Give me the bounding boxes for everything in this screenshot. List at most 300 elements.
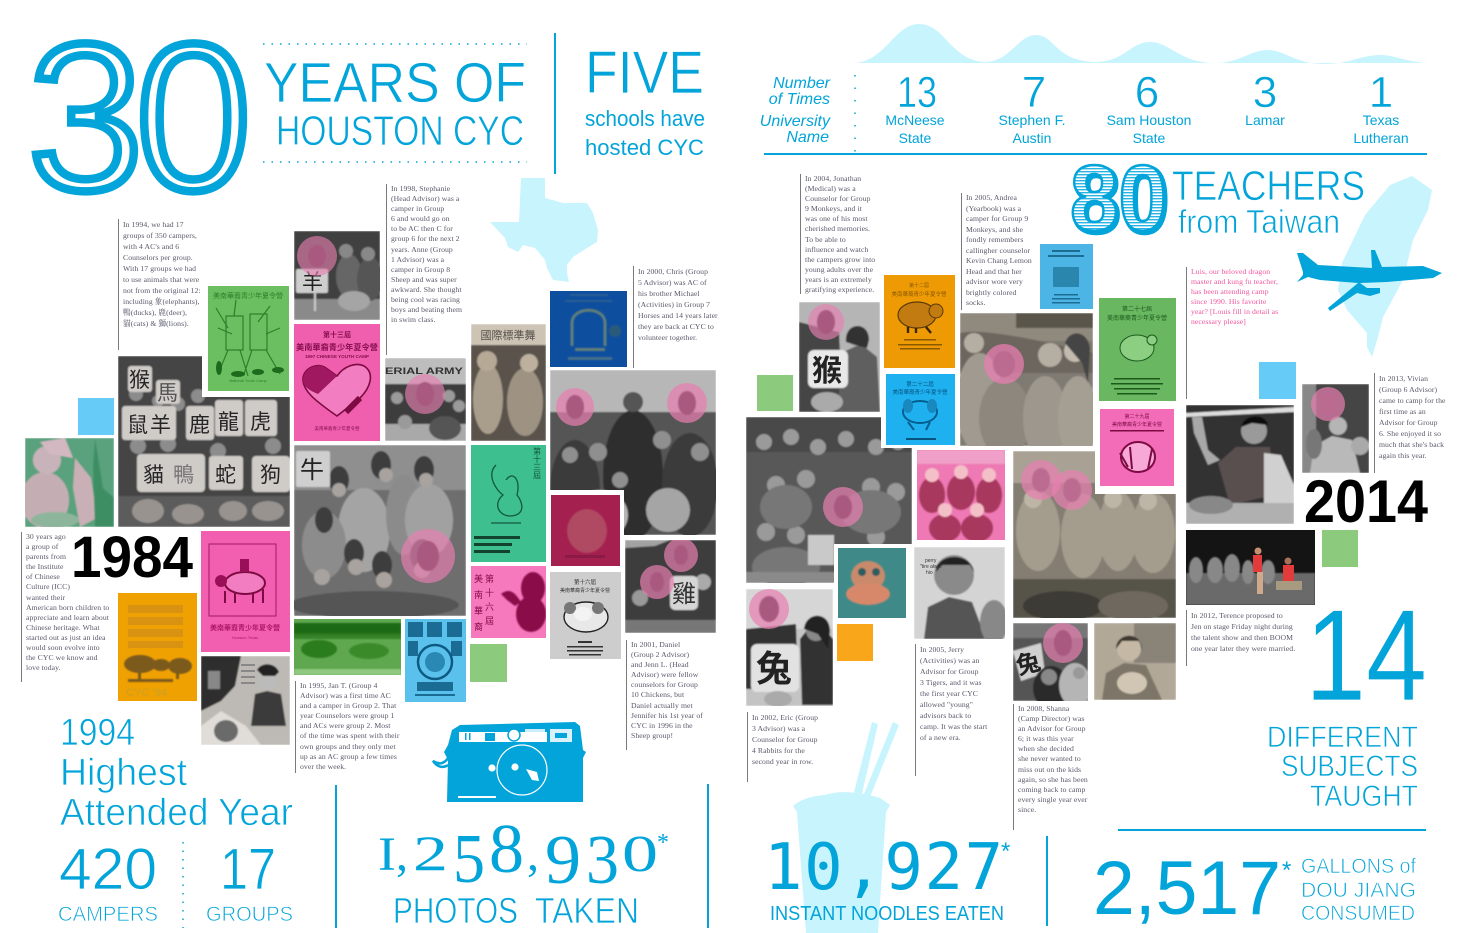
note: 2001: In 2001, Daniel	[631, 640, 680, 649]
white mat around pink tiger poster	[1095, 405, 1180, 494]
note: 1994: groups of 350 campers,	[123, 231, 197, 240]
photo: Jerry	[914, 547, 1005, 639]
poster: dark blue	[550, 291, 627, 367]
note: 2004	[800, 174, 875, 294]
note: 1995: up as an AC group a few times	[300, 752, 397, 761]
photo: ballroom clipping	[471, 324, 546, 441]
chart: wave of school counts	[760, 24, 1428, 64]
stat: photos taken: PHOTOS	[393, 890, 518, 931]
photo: rabbit group: 兔	[1013, 648, 1043, 681]
photo: four counselors	[960, 313, 1093, 446]
divider	[707, 784, 709, 928]
note: 2005 Andrea: socks.	[966, 298, 986, 307]
note: 2001: CYC in 1996 in the	[631, 721, 693, 730]
note: 2005 Jerry: Advisor for Group	[920, 667, 979, 676]
photo: chicken sign with pink circles: 雞	[672, 581, 696, 608]
poster: green turtle: 第二十七屆	[1122, 305, 1152, 313]
note: 2002	[747, 712, 818, 782]
note: 2000: 5 Advisor) was AC of	[638, 278, 707, 287]
poster: blue small	[1040, 244, 1093, 309]
note: Luis: Luis, our beloved dragon	[1191, 267, 1270, 276]
title: years of Houston CYC	[263, 44, 527, 162]
stat: 14 different subjects taught: 14	[1305, 582, 1427, 728]
five schools have hosted CYC: hosted CYC	[585, 135, 704, 160]
80 teachers from Taiwan: TEACHERS	[1172, 162, 1365, 209]
note: 1998: boys and beating them	[391, 305, 462, 314]
photo: big group ox sign: 牛	[300, 457, 324, 484]
note: 1998: (Head Advisor) was a	[391, 194, 459, 203]
note: 2000: Horses and 14 years later	[638, 311, 718, 320]
note: 1995	[295, 681, 400, 773]
poster: pink heart: 美南華裔青少年夏令營	[314, 425, 360, 432]
stat: photos taken: I	[378, 828, 396, 881]
photo: green duotone	[25, 438, 114, 527]
photo: ballroom clipping: 國際標準舞	[480, 328, 536, 342]
note: 1994: With 17 groups we had	[123, 264, 196, 273]
stat: gallons of dou jiang: CONSUMED	[1301, 902, 1415, 925]
poster: pink 16th: 裔	[474, 621, 483, 632]
note: 2004: gratifying experience.	[805, 285, 874, 294]
note: 2001: and Jenn L. (Head	[631, 660, 689, 669]
stat: 14 different subjects taught: DIFFERENT	[1267, 721, 1418, 754]
note: 2008: In 2008, Shanna	[1018, 704, 1069, 713]
poster: green vegetables: 美南華裔青少年夏令營	[213, 291, 283, 300]
photo: old group sepia	[1013, 451, 1176, 618]
note: 2008: an Advisor for Group	[1018, 724, 1086, 733]
note: 2005 Andrea: In 2005, Andrea	[966, 193, 1017, 202]
note: 2005 Andrea: Head and that her	[966, 266, 1022, 276]
photo: zodiac signs group: 龍	[218, 411, 239, 434]
icon: Taiwan map	[1338, 176, 1432, 357]
table: universities and times hosted: Austin	[1013, 130, 1051, 146]
poster: sheep: 第十六屆	[574, 578, 596, 586]
poster: green turtle: 美南華裔青少年夏令營	[1107, 314, 1167, 322]
photo: large group with pink circles	[550, 370, 716, 535]
poster: sheep	[550, 572, 621, 659]
photo: monkey sign	[799, 302, 880, 412]
table: universities and times hosted: Lutheran	[1353, 130, 1409, 146]
poster: pink heart: 美南華裔青少年夏令營	[296, 342, 378, 352]
poster: teal rabbit: 第十三屆	[532, 446, 542, 480]
note: 2005 Andrea: Kevin Chang Lemon	[966, 256, 1032, 265]
note: 1998: camper in Group	[391, 204, 444, 213]
poster: pink 16th: 南	[474, 589, 483, 600]
note: 2004: 9 Monkeys, and it	[805, 204, 862, 213]
poster: blue dog: 美南華裔青少年夏令營	[892, 388, 948, 396]
stat: 420 campers and 17 groups: 17	[220, 837, 276, 902]
stat: photos taken: 9	[545, 822, 581, 899]
note: 30 years ago: Chinese heritage. What	[26, 623, 100, 632]
note: 2005 Jerry: the first year CYC	[920, 689, 978, 698]
big year 2014: 2014	[1304, 468, 1429, 535]
note: 2000: (Activities) in Group 7	[638, 300, 710, 309]
note: 1998: 6 and would go on	[391, 214, 450, 223]
photo: zodiac signs group: 狗	[260, 464, 281, 487]
note: 1995: In 1995, Jan T. (Group 4	[300, 681, 377, 690]
note: 30 years ago: parents from	[26, 552, 66, 561]
note: 1998: 1 Advisor) was a	[391, 255, 444, 264]
note: 2005 Andrea: camper for Group 9	[966, 214, 1028, 223]
note: 2004: young adults over the	[805, 265, 873, 274]
note: 30 years ago: of Chinese	[26, 572, 60, 581]
note: 1994: not from the original 12:	[123, 286, 201, 295]
poster: pink 16th: 美	[474, 573, 483, 584]
photo: zodiac signs group: 猴	[129, 369, 150, 392]
stat: 14 different subjects taught	[1267, 582, 1427, 813]
note: Luis: master and kung fu teacher,	[1191, 277, 1278, 286]
note: 2005 Andrea: callingher counselor	[966, 246, 1030, 254]
stat: photos taken: *	[657, 830, 669, 856]
photo: big group ox sign	[294, 445, 466, 616]
note: 2005 Andrea: Monkeys, and she	[966, 224, 1023, 234]
photo: group with banner	[385, 358, 466, 441]
note: 2001: 10 Chickens, but	[631, 690, 684, 699]
poster: pink ox	[201, 531, 290, 652]
photo: rabbit group	[1013, 623, 1088, 701]
stat: photos taken	[378, 811, 669, 931]
note: 2004: years is an extremely	[805, 275, 872, 284]
photo: pink group	[917, 450, 1005, 540]
note: 2004: influence and watch	[805, 245, 868, 254]
note: 1995: of the time was spent with their	[300, 731, 400, 740]
five schools have hosted CYC: FIVE	[585, 39, 704, 106]
white mat around blue dog poster	[881, 370, 912, 448]
note: 30 years ago: the Institute	[26, 562, 64, 571]
note: Luis	[1186, 267, 1278, 399]
table: universities and times hosted: Lamar	[1245, 112, 1285, 128]
icon: airplane	[1297, 250, 1442, 311]
note: 30 years ago: Culture (ICC)	[26, 582, 70, 591]
table: universities and times hosted: McNeese	[885, 112, 945, 128]
photo: Jerry: "tire alwin"	[920, 564, 944, 570]
note: 2005 Jerry: of a new era.	[920, 733, 961, 742]
80 teachers from Taiwan: 80	[1072, 148, 1169, 252]
stat: photos taken: 3	[586, 822, 619, 899]
photo: rabbit sign	[746, 589, 833, 706]
stat: 420 campers and 17 groups: GROUPS	[206, 903, 293, 926]
stat: 1994 highest attended year: 1994	[60, 712, 135, 754]
note: 2004: the campers grow into	[805, 255, 875, 264]
poster: blue star	[405, 619, 466, 702]
note: 1998: awkward. She thought	[391, 285, 462, 294]
photo: zodiac signs group: 鴨	[173, 464, 194, 487]
photo: zodiac signs group: 鹿	[189, 414, 210, 437]
note: 2013: much that she's back	[1379, 440, 1444, 449]
photo: sheep sign group: 羊	[302, 271, 323, 294]
photo: zodiac signs group: 貓	[143, 464, 164, 487]
stat: 1994 highest attended year: Attended Year	[60, 792, 293, 834]
note: 30 years ago: appreciate and learn about	[26, 613, 109, 622]
note: 2000: his brother Michael	[638, 289, 700, 298]
poster: green vegetables: National Youth Camp	[229, 378, 268, 383]
divider	[335, 785, 337, 928]
photo: zodiac signs group: 鼠	[127, 414, 148, 437]
photo: zodiac signs group	[118, 356, 290, 527]
note: 30 years ago: American born children to	[26, 603, 109, 612]
note: 1995: own groups and they only met	[300, 742, 396, 751]
poster: green vegetables	[208, 286, 289, 391]
white mat behind poster	[202, 282, 295, 397]
note: 30 years ago: love today.	[26, 663, 61, 672]
note: 2013: In 2013, Vivian	[1379, 374, 1428, 383]
poster: pink 16th: 十	[485, 587, 494, 598]
note: 2005 Jerry	[915, 644, 987, 776]
photo: zodiac signs group: 蛇	[215, 464, 236, 487]
poster: orange pig	[884, 275, 955, 368]
stat: 420 campers and 17 groups: CAMPERS	[58, 903, 158, 926]
note: 2008: (Camp Director) was	[1018, 714, 1084, 723]
photo: sheep sign group	[294, 231, 380, 320]
note: 2005 Andrea: brightly colored	[966, 288, 1017, 296]
stat: instant noodles eaten: 10,927	[764, 831, 1005, 905]
note: 2002: 3 Advisor) was a	[752, 724, 805, 733]
note: 1998: to be AC then C for	[391, 224, 453, 233]
table: universities and times hosted: of Times	[769, 91, 830, 108]
icon: Texas map	[490, 178, 598, 282]
photo: big group monkey	[746, 417, 912, 583]
note: 1994: with 4 AC's and 6	[123, 242, 179, 251]
table: universities and times hosted: State	[899, 130, 932, 146]
80 teachers from Taiwan	[1070, 146, 1365, 252]
note: 2005 Andrea: advisor wore very	[966, 277, 1023, 286]
poster: maroon	[551, 495, 620, 566]
photo: monkey sign: 猴	[812, 355, 842, 388]
note: Luis: since 1990. His favorite	[1191, 297, 1266, 306]
table: universities and times hosted: Sam Houston	[1107, 112, 1191, 128]
stat: photos taken: TAKEN	[535, 890, 639, 931]
stat: instant noodles eaten: *	[1001, 838, 1010, 865]
five schools have hosted CYC	[585, 39, 705, 160]
photo: rabbit sign: 兔	[756, 648, 792, 689]
table: universities and times hosted: 7	[1022, 68, 1046, 117]
stat: photos taken: ,	[527, 828, 539, 881]
poster: pink 16th: 第	[485, 573, 494, 584]
note: 2012: In 2012, Terence proposed to	[1191, 611, 1283, 620]
table: universities and times hosted: University	[760, 113, 831, 130]
note: 1998	[386, 184, 462, 355]
note: 2005 Jerry: In 2005, Jerry	[920, 645, 964, 654]
photo: Vivian	[1302, 384, 1369, 473]
note: 2000	[633, 266, 718, 368]
note: 2005 Andrea	[961, 193, 1032, 310]
colored square	[837, 624, 873, 661]
stat: photos taken: 0	[622, 826, 658, 883]
note: 2001: Daniel actually met	[631, 701, 693, 710]
note: 2004: (Medical) was a	[805, 184, 856, 193]
note: 1995: and ACs were group 2. Most	[300, 721, 390, 730]
divider top	[554, 33, 556, 174]
icon: noodle cup with chopsticks	[793, 722, 899, 933]
colored square	[1259, 362, 1296, 399]
note: 1994: to use animals that were	[123, 275, 199, 284]
photo: chicken sign with pink circles	[625, 540, 716, 633]
photo: woman smiling	[1094, 623, 1176, 700]
white mat around maroon poster	[546, 490, 624, 572]
note: 1994	[118, 219, 201, 350]
stat: instant noodles eaten: INSTANT NOODLES EATEN	[770, 903, 1004, 925]
table: universities and times hosted	[760, 68, 1427, 155]
poster: pink tiger	[1100, 409, 1174, 486]
photo: zodiac signs group: 馬	[157, 382, 178, 405]
table: universities and times hosted: 3	[1253, 68, 1277, 117]
note: 2005 Jerry: (Activities) was an	[920, 656, 980, 665]
note: 2013: came to camp for the	[1379, 396, 1446, 405]
note: 2008: she never wanted to	[1018, 754, 1081, 763]
note: 2000: they are back at CYC to	[638, 322, 714, 331]
note: 1995: year Counselors were group 1	[300, 711, 394, 720]
note: 1995: and a camper in Group 2. That	[300, 701, 396, 710]
stat: photos taken: 2	[413, 825, 448, 881]
poster: orange trees	[118, 593, 197, 701]
note: 1994: Counselors per group.	[123, 253, 193, 262]
note: 2001: counselors for Group	[631, 680, 698, 689]
stat: gallons of dou jiang: DOU JIANG	[1301, 879, 1416, 902]
photo: group with banner: ERIAL ARMY	[385, 366, 464, 377]
note: 1998: In 1998, Stephanie	[391, 184, 450, 193]
photo: green banquet	[294, 619, 401, 675]
poster: blue dog: 第二十二屆	[906, 380, 934, 388]
note: 2013: (Group 6 Advisor)	[1379, 385, 1437, 394]
five schools have hosted CYC: schools have	[585, 106, 705, 131]
note: 2001: Advisor) were fellow	[631, 670, 698, 679]
poster: teal rabbit	[471, 445, 546, 562]
note: 2005 Jerry: advisors back to	[920, 711, 971, 720]
note: 30 years ago: would soon evolve into	[26, 643, 100, 652]
note: 1998: being cool was racing	[391, 295, 460, 304]
title: years of Houston CYC: HOUSTON CYC	[276, 107, 524, 154]
stat: 420 campers and 17 groups: 420	[59, 837, 157, 902]
note: 1998: camper in Group 8	[391, 265, 450, 274]
80 teachers from Taiwan: 80	[1070, 146, 1167, 250]
note: 2001: Sheep group!	[631, 731, 673, 740]
note: 30 years ago: 30 years ago	[26, 532, 66, 541]
icon: camera	[433, 722, 586, 802]
colored square	[78, 398, 114, 435]
poster: orange pig: 第十二屆	[909, 282, 929, 289]
note: 1994: In 1994, we had 17	[123, 220, 184, 229]
poster: pink heart: 1997 CHINESE YOUTH CAMP	[305, 354, 369, 359]
note: 2005 Jerry: 3 Tigers, and it was	[920, 678, 982, 687]
note: Luis: year? [Louis fill in detail as	[1191, 307, 1278, 316]
note: 2001: Jennifer his 1st year of	[631, 711, 703, 720]
stat: photos taken: ,	[396, 828, 408, 881]
note: 2001: (Group 2 Advisor)	[631, 650, 689, 659]
note: 2004: In 2004, Jonathan	[805, 174, 861, 183]
note: 1994: 鴨(ducks), 鹿(deer),	[123, 308, 187, 317]
note: 1998: group 6 for the next 2	[391, 234, 460, 243]
table: universities and times hosted: 13	[897, 68, 937, 117]
poster: teal monkey	[838, 548, 906, 618]
note: 2013: again this year.	[1379, 451, 1427, 460]
white mat around teal poster	[834, 544, 912, 589]
stat: 14 different subjects taught: TAUGHT	[1310, 780, 1418, 813]
poster: pink 16th	[471, 566, 546, 638]
note: 2008: coming back to camp	[1018, 785, 1085, 794]
note: 1995: Advisor) was a first time AC	[300, 691, 391, 700]
photo: woman on phone	[201, 656, 290, 745]
note: 2013: Advisor for Group	[1379, 418, 1438, 427]
photo: man with staff	[1186, 405, 1294, 524]
note: Luis: has been attending camp	[1191, 287, 1269, 296]
stat: 420 campers and 17 groups	[58, 837, 293, 928]
stat: 14 different subjects taught: SUBJECTS	[1281, 750, 1418, 783]
stat: 1994 highest attended year	[60, 712, 293, 834]
table: universities and times hosted: Stephen F.	[999, 112, 1065, 128]
note: 2008: again, so she has been	[1018, 775, 1088, 784]
stat: 1994 highest attended year: Highest	[60, 752, 187, 794]
note: 2012: the talent show and then BOOM	[1191, 633, 1293, 642]
poster: green turtle	[1099, 298, 1176, 401]
note: 2008: since.	[1018, 805, 1036, 814]
note: 2012	[1186, 610, 1295, 666]
table: universities and times hosted: State	[1133, 130, 1166, 146]
poster: pink 16th: 屆	[485, 616, 494, 626]
note: 2002: second year in row.	[752, 757, 813, 766]
colored square	[470, 644, 507, 682]
note: 2013	[1374, 373, 1446, 473]
note: 2004: cherished memories.	[805, 224, 870, 233]
stat: gallons of dou jiang: *	[1282, 857, 1291, 884]
note: 2005 Andrea: (Yearbook) was a	[966, 204, 1021, 212]
divider right	[1118, 829, 1426, 831]
poster: pink ox: Houston Texas	[232, 635, 258, 640]
divider	[1046, 836, 1048, 926]
poster: pink heart: 第十三屆	[323, 330, 351, 339]
table: universities and times hosted: 6	[1135, 68, 1159, 117]
note: 2008: miss out on the kids	[1018, 765, 1081, 774]
note: 30 years ago: started out as just an idea	[26, 633, 106, 642]
note: 2004: To be able to	[805, 235, 846, 244]
note: 2013: 6. She enjoyed it so	[1379, 429, 1441, 438]
stat: photos taken: 8	[489, 811, 524, 888]
note: 2005 Andrea: fondly remembers	[966, 235, 1023, 244]
table: universities and times hosted: 1	[1369, 68, 1393, 117]
80 teachers from Taiwan: from Taiwan	[1178, 203, 1340, 240]
table: universities and times hosted: Number	[773, 75, 831, 92]
note: 30 years ago: a group of	[26, 542, 58, 551]
note: 1998: years. Anne (Group	[391, 245, 453, 254]
photo: zodiac signs group: 虎	[250, 411, 271, 434]
stat: gallons of dou jiang: GALLONS of	[1301, 855, 1416, 878]
note: 1994: including 象(elephants),	[123, 297, 200, 306]
poster: pink heart	[294, 324, 380, 441]
poster: pink ox: 美南華裔青少年夏令營	[210, 623, 280, 632]
note: 1995: over the week.	[300, 762, 346, 771]
stat: gallons of dou jiang	[1093, 846, 1416, 931]
note: 2000: volunteer together.	[638, 333, 697, 342]
note: Luis: necessary please]	[1191, 317, 1246, 326]
note: 30 years ago: wanted their	[26, 593, 65, 602]
table: universities and times hosted: Name	[786, 129, 829, 146]
note: 2012: Jen on stage Friday night during	[1191, 622, 1293, 631]
note: 2002: Counselor for Group	[752, 735, 818, 744]
note: 1994: 貓(cats) & 獅(lions).	[123, 319, 189, 328]
table: universities and times hosted: Texas	[1363, 112, 1399, 128]
note: 2008: when she decided	[1018, 744, 1074, 753]
poster: orange pig: 美南華裔青少年夏令營	[891, 290, 947, 298]
note: 2000: In 2000, Chris (Group	[638, 267, 708, 276]
photo: zodiac signs group: 羊	[150, 414, 171, 437]
poster: orange trees: CYC '94	[126, 687, 168, 699]
colored square	[757, 375, 793, 411]
note: 2004: Counselor for Group	[805, 194, 871, 203]
poster: pink 16th: 華	[474, 605, 483, 616]
note: 2005 Jerry: allowed "young"	[920, 700, 973, 709]
poster: pink 16th: 六	[485, 601, 494, 612]
note: 2004: was one of his most	[805, 214, 868, 223]
note: 2002: 4 Rabbits for the	[752, 746, 805, 755]
note: 2005 Jerry: camp. It was the start	[920, 722, 987, 731]
